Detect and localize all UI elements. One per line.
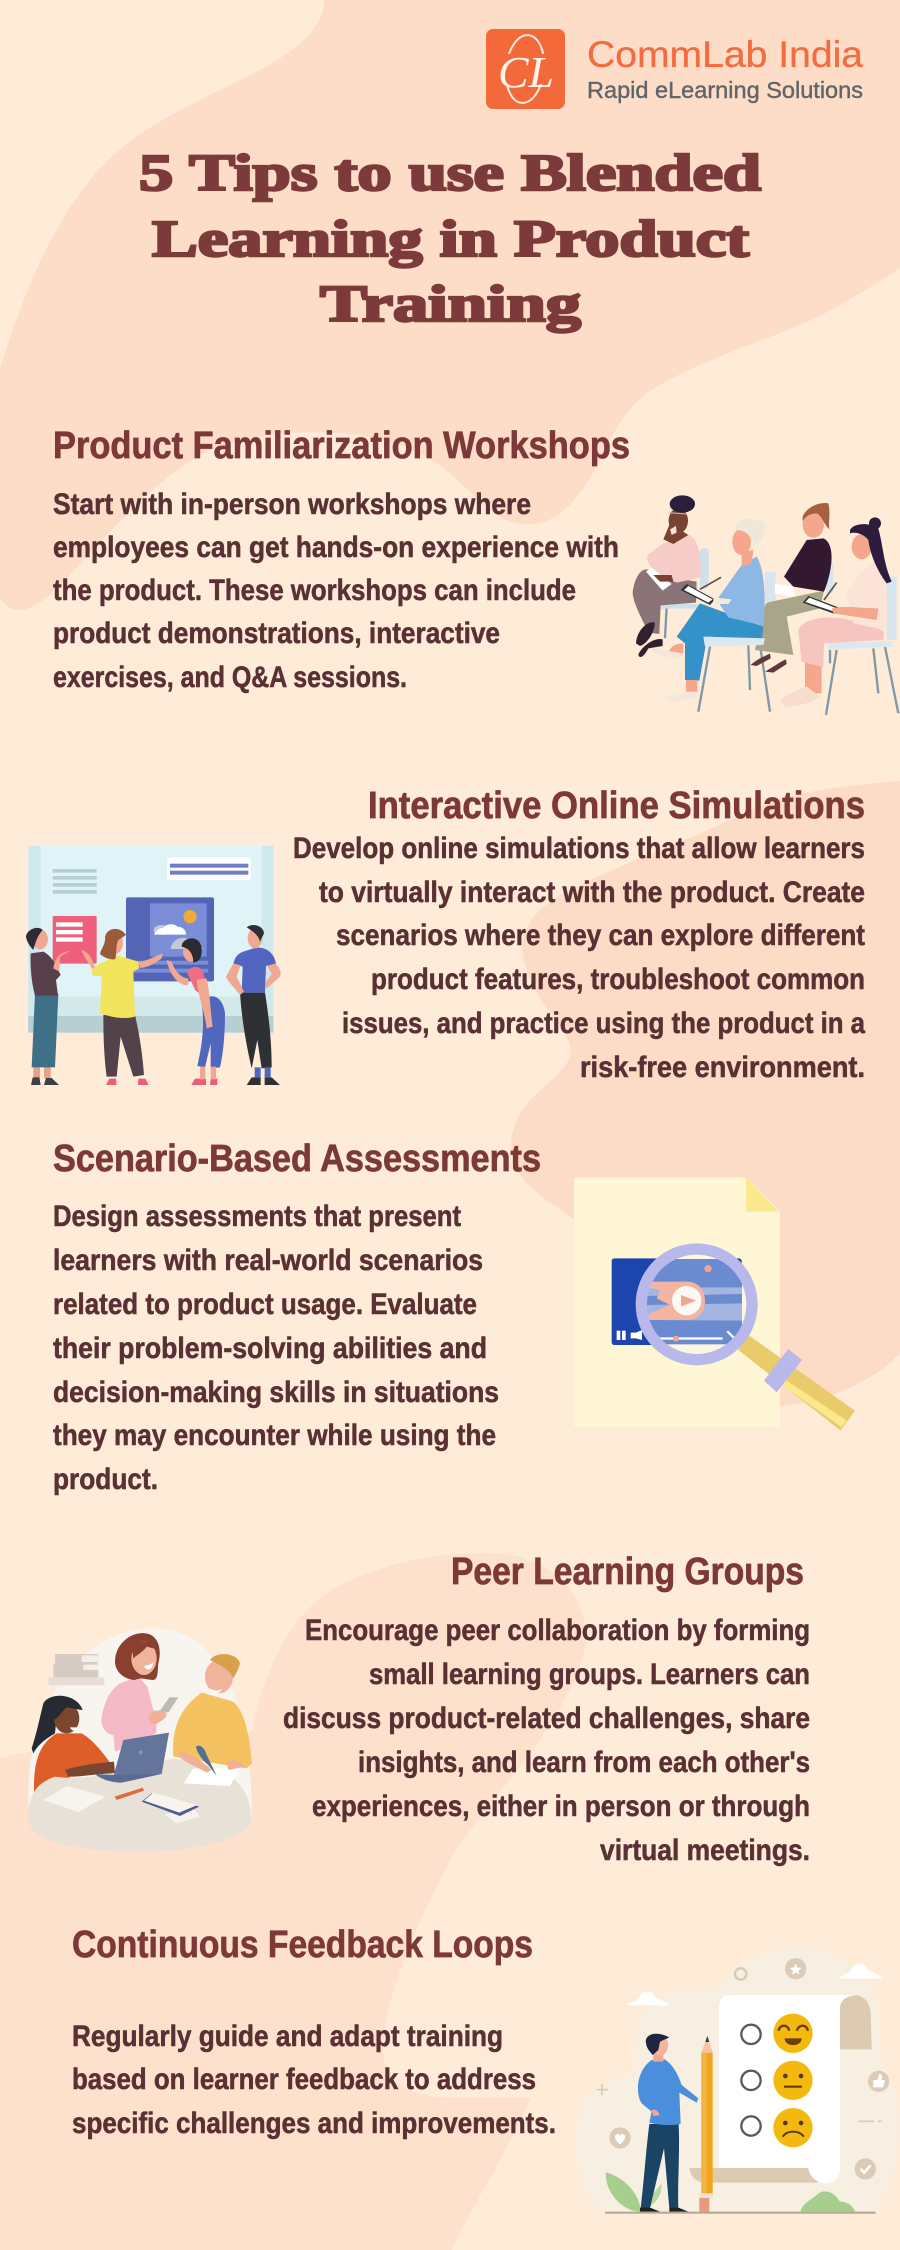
person: woman in orange (32, 1696, 115, 1792)
text block: workshops: exercises, and Q&A sessions. (53, 661, 407, 694)
text block: assessments: related to product usage. Evaluate (53, 1288, 477, 1321)
title: Training (320, 276, 581, 333)
magnifying glass lens (641, 1249, 752, 1360)
title (139, 145, 761, 333)
icon: CL logo mark: CL (498, 48, 554, 97)
text block: simulations: risk-free environment. (580, 1051, 865, 1084)
magnifying glass collar (764, 1349, 802, 1392)
text block: assessments: decision-making skills in situations (53, 1376, 499, 1409)
illustration: people in a workshop (633, 495, 898, 715)
emoji: happy (773, 2014, 813, 2053)
text block: assessments: product. (53, 1463, 158, 1496)
plants (606, 2172, 855, 2212)
magnifying glass handle (738, 1335, 855, 1431)
table (28, 1758, 252, 1852)
survey sheet (689, 1995, 872, 2183)
emoji: neutral (773, 2061, 813, 2100)
illustration: peer group around a table (28, 1628, 252, 1852)
text block: peer groups: small learning groups. Learners can (369, 1658, 810, 1691)
text block: assessments: they may encounter while using the (53, 1419, 496, 1452)
heading: Peer Learning Groups: Peer Learning Groups (451, 1551, 804, 1593)
title: Learning in Product (152, 211, 750, 268)
person: woman leaning (167, 938, 225, 1085)
text block: feedback: Regularly guide and adapt training (72, 2020, 503, 2053)
text block: peer groups: virtual meetings. (600, 1834, 810, 1867)
notebooks and papers (43, 1768, 239, 1823)
document (574, 1177, 780, 1427)
person 1 (633, 495, 701, 657)
person: standing woman in pink (101, 1633, 178, 1752)
logo tagline: Rapid eLearning Solutions (587, 77, 863, 103)
video player (612, 1258, 742, 1345)
text block: feedback: specific challenges and improvements. (72, 2107, 556, 2140)
person 4 (781, 517, 893, 707)
illustration: team at a display board (26, 846, 281, 1085)
person: man with arms crossed (26, 928, 70, 1085)
text block: assessments (53, 1200, 499, 1496)
rating options (741, 2025, 761, 2136)
icon: CL logo mark (486, 29, 565, 109)
ground line (605, 2212, 876, 2214)
text block: assessments: learners with real-world scenarios (53, 1244, 483, 1277)
heading: Interactive Online Simulations: Interactive Online Simulations (368, 785, 865, 827)
person: man in blue tee (226, 925, 281, 1085)
illustration: document with magnifying glass over video (574, 1177, 855, 1431)
person holding pencil (638, 2034, 698, 2212)
text block: assessments: their problem-solving abilities and (53, 1332, 487, 1365)
heading: Continuous Feedback Loops: Continuous Feedback Loops (72, 1924, 533, 1966)
writing hand and pen (179, 1746, 245, 1776)
decorative badges and clouds (597, 1958, 889, 2180)
pen (115, 1788, 144, 1800)
text block: peer groups: discuss product-related challenges, share (283, 1702, 810, 1735)
text block: peer groups: insights, and learn from each other's (358, 1746, 810, 1779)
text block: peer groups: Encourage peer collaboration by forming (305, 1614, 810, 1647)
laptop (95, 1733, 169, 1783)
text block: assessments: Design assessments that present (53, 1200, 461, 1233)
emoji: sad (773, 2108, 813, 2147)
illustration: feedback survey with emoji ratings (577, 1948, 899, 2214)
text block: peer groups: experiences, either in person or through (312, 1790, 810, 1823)
text block: simulations (293, 832, 866, 1084)
person 3 (751, 503, 832, 673)
text block: workshops (53, 488, 619, 694)
heading: Scenario-Based Assessments: Scenario-Based Assessments (53, 1138, 541, 1180)
text block: feedback: based on learner feedback to address (72, 2063, 536, 2096)
person: man in yellow (173, 1654, 252, 1768)
text block: workshops: product demonstrations, interactive (53, 617, 500, 650)
logo: CommLab India (486, 29, 863, 109)
heading: Product Familiarization Workshops: Product Familiarization Workshops (53, 425, 630, 467)
title: 5 Tips to use Blended (139, 145, 761, 202)
logo wordmark: CommLab India (587, 34, 863, 75)
text block: workshops: the product. These workshops can include (53, 574, 576, 607)
text block: feedback (72, 2020, 556, 2140)
person 2 (650, 519, 765, 703)
person: woman in yellow (82, 929, 163, 1085)
text block: workshops: Start with in-person workshops where (53, 488, 531, 521)
text block: peer groups (283, 1614, 810, 1867)
text block: workshops: employees can get hands-on experience with (53, 531, 619, 564)
pencil (699, 2036, 713, 2212)
